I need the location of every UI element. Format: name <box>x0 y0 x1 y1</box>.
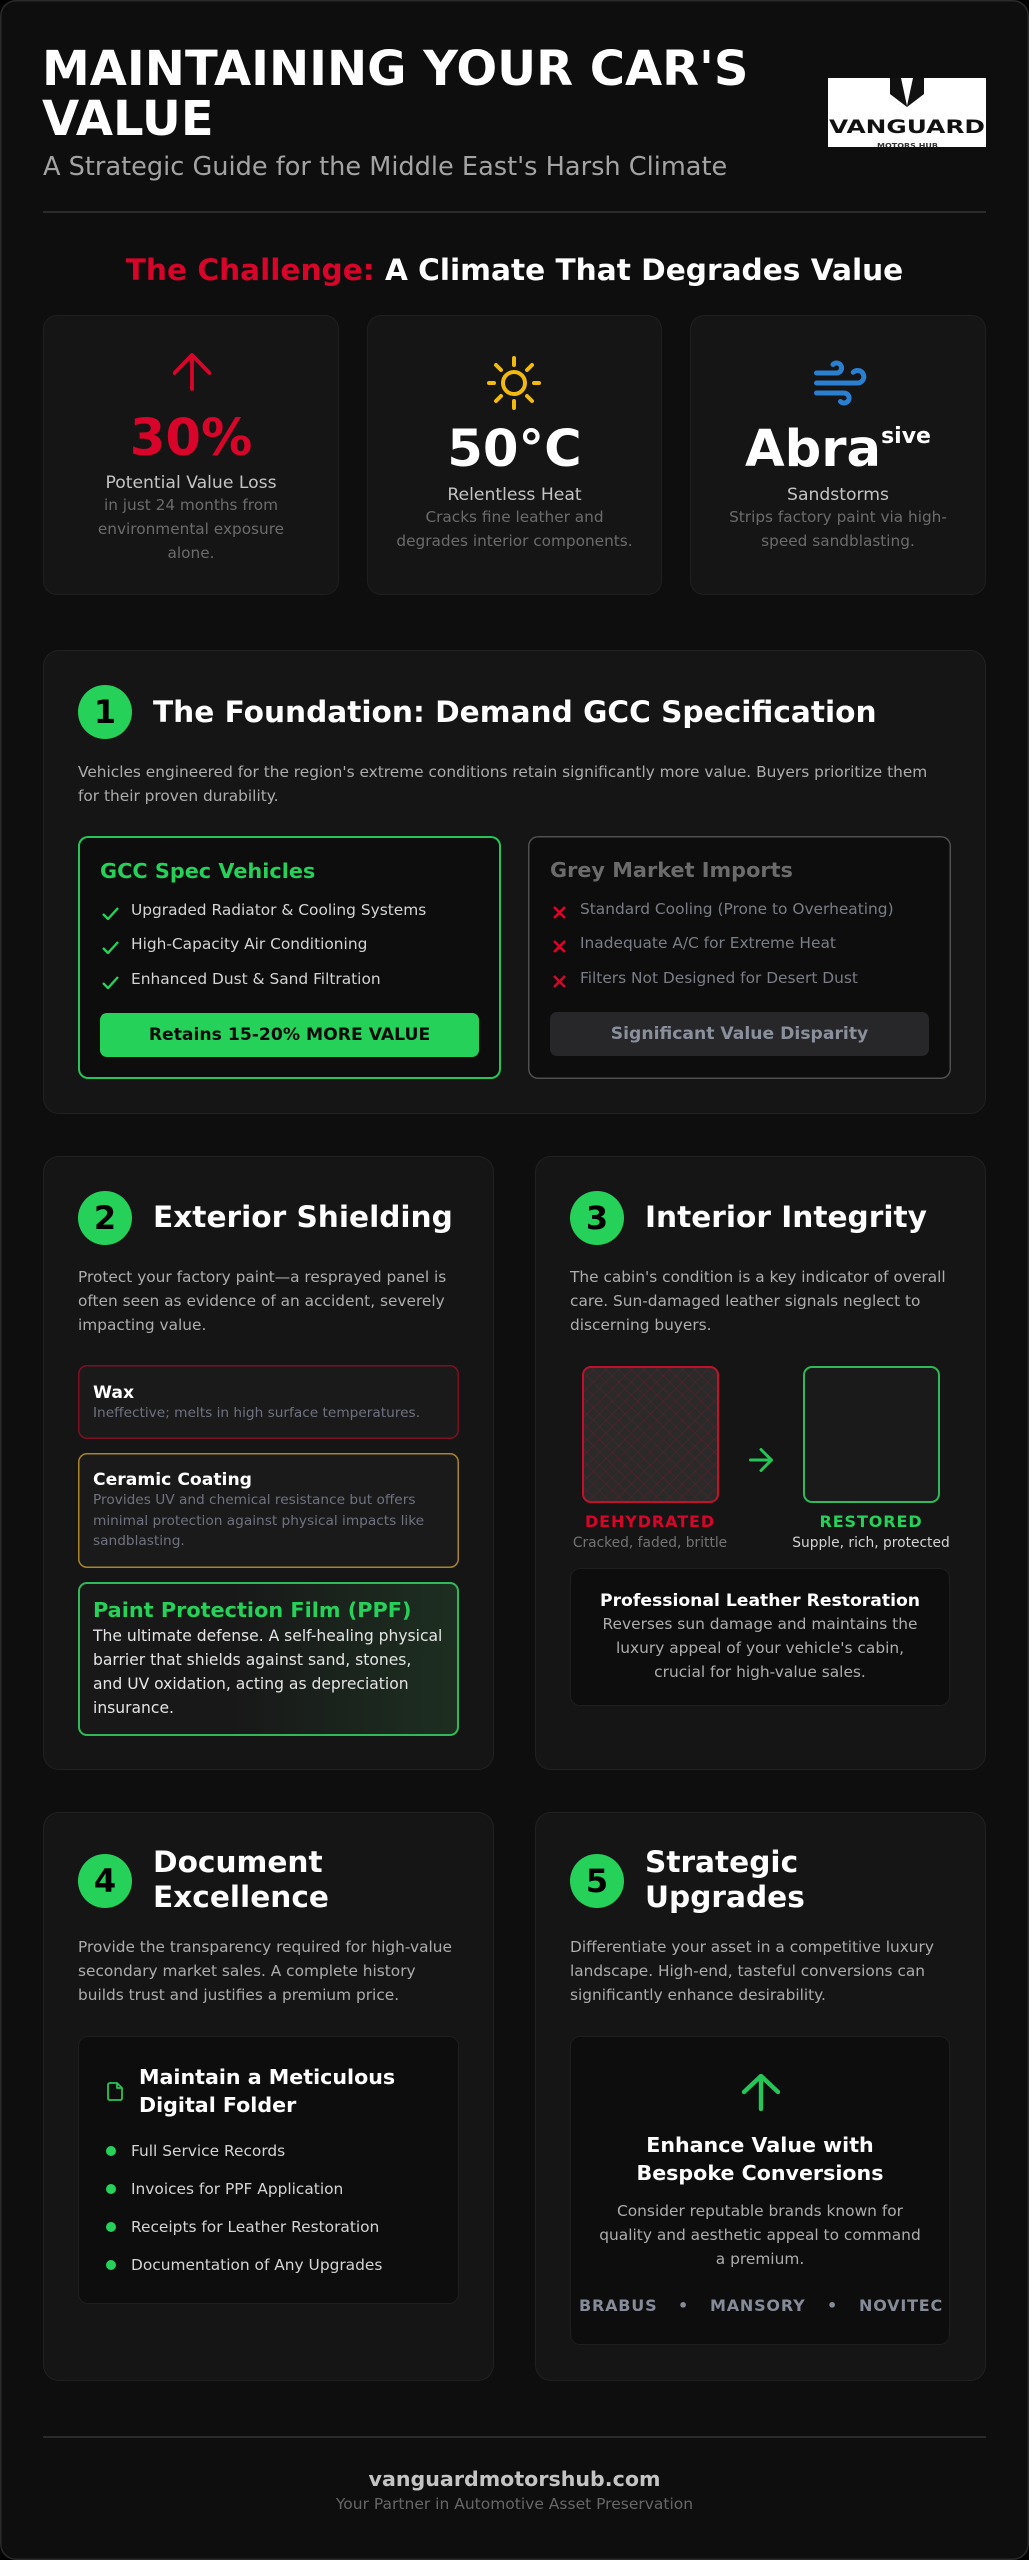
stat description: speed sandblasting. <box>761 532 915 550</box>
panel: stat 30 percent <box>43 315 339 595</box>
intro text <box>78 763 927 805</box>
heading: the challenge: The Challenge: A Climate That Degrades Value <box>126 253 903 287</box>
intro text: Provide the transparency required for high-value <box>78 1938 452 1956</box>
swatch: dehydrated leather <box>582 1366 719 1503</box>
intro text <box>78 1938 452 2004</box>
brand names: • <box>678 2296 689 2315</box>
panel: digital folder checklist <box>78 2036 459 2304</box>
disparity badge <box>550 1012 929 1056</box>
option: wax: Ineffective; melts in high surface temperatures. <box>93 1405 420 1421</box>
stat value: 30% <box>130 408 252 468</box>
callout: professional leather restoration <box>570 1568 950 1706</box>
icon: cross <box>553 975 566 988</box>
option: wax <box>78 1365 459 1439</box>
footer website: vanguardmotorshub.com <box>369 2467 660 2491</box>
brand names: NOVITEC <box>859 2296 943 2315</box>
option: paint protection film: and UV oxidation, acting as depreciation <box>93 1675 409 1693</box>
intro text: impacting value. <box>78 1316 206 1334</box>
option: paint protection film <box>78 1582 459 1736</box>
icon: cross <box>553 940 566 953</box>
panel: section 5 strategic upgrades <box>535 1812 986 2381</box>
caption: restored: Supple, rich, protected <box>792 1535 950 1551</box>
intro text: care. Sun-damaged leather signals neglect to <box>570 1292 920 1310</box>
logo: Vanguard Motors Hub <box>828 78 986 147</box>
heading: The Foundation: Demand GCC Specification <box>153 695 877 729</box>
stat value: 50°C <box>447 419 582 479</box>
checklist items: Full Service Records <box>131 2142 285 2160</box>
number badge 1: 1 <box>94 693 116 731</box>
stat description: degrades interior components. <box>396 532 633 550</box>
heading: Document <box>153 1845 323 1879</box>
option: ceramic coating <box>78 1453 459 1568</box>
grey feature list: Inadequate A/C for Extreme Heat <box>580 934 836 952</box>
icon: check <box>102 976 119 989</box>
intro text: builds trust and justifies a premium price. <box>78 1986 399 2004</box>
checklist heading <box>139 2065 395 2117</box>
brand names: • <box>827 2296 838 2315</box>
number badge 5 <box>570 1854 624 1908</box>
heading: Excellence <box>153 1880 329 1914</box>
stat description: alone. <box>168 544 214 562</box>
icon: check <box>102 941 119 954</box>
checklist items <box>106 2142 382 2274</box>
caption: dehydrated: Cracked, faded, brittle <box>573 1535 727 1551</box>
icon: document <box>107 2082 123 2101</box>
heading <box>153 1845 329 1914</box>
GCC feature list: Enhanced Dust & Sand Filtration <box>131 970 381 988</box>
option: paint protection film: Paint Protection Film (PPF) <box>93 1598 411 1622</box>
grey feature list: Filters Not Designed for Desert Dust <box>580 969 858 987</box>
callout: professional leather restoration: luxury appeal of your vehicle's cabin, <box>616 1639 904 1657</box>
icon: green up arrow <box>742 2074 780 2111</box>
option: wax: Wax <box>93 1383 134 1403</box>
icon: red up arrow <box>173 353 211 391</box>
footer tagline: Your Partner in Automotive Asset Preservation <box>336 2495 693 2513</box>
grey feature list: Standard Cooling (Prone to Overheating) <box>580 900 894 918</box>
value badge <box>100 1013 479 1057</box>
callout text: Consider reputable brands known for <box>617 2202 903 2220</box>
number badge 2: 2 <box>94 1199 116 1237</box>
option: ceramic coating: Ceramic Coating <box>93 1470 252 1490</box>
heading: Exterior Shielding <box>153 1200 453 1234</box>
label: dehydrated: DEHYDRATED <box>585 1512 715 1531</box>
number badge 4 <box>78 1854 132 1908</box>
callout: professional leather restoration: Professional Leather Restoration <box>600 1591 920 1611</box>
panel: stat 50 degrees <box>367 315 662 595</box>
intro text: discerning buyers. <box>570 1316 712 1334</box>
checklist heading: Maintain a Meticulous <box>139 2065 395 2089</box>
panel: section 3 interior integrity <box>535 1156 986 1770</box>
stat description: Strips factory paint via high- <box>729 508 947 526</box>
brand names: BRABUS <box>579 2296 657 2315</box>
checklist items: Receipts for Leather Restoration <box>131 2218 379 2236</box>
heading: Interior Integrity <box>645 1200 927 1234</box>
stat description <box>729 508 947 550</box>
intro text: landscape. High-end, tasteful conversions can <box>570 1962 925 1980</box>
panel: section 2 exterior shielding <box>43 1156 494 1770</box>
panel: GCC spec vehicles <box>78 836 501 1079</box>
brand names: MANSORY <box>710 2296 805 2315</box>
callout heading: Enhance Value with <box>646 2133 874 2157</box>
stat description: environmental exposure <box>98 520 284 538</box>
panel: bespoke conversions <box>570 2036 950 2345</box>
stat value: Abrasive <box>745 419 931 479</box>
title: MAINTAINING YOUR CAR'S <box>42 41 748 97</box>
grey heading: Grey Market Imports <box>550 858 793 882</box>
intro text <box>570 1268 946 1334</box>
heading: Upgrades <box>645 1880 805 1914</box>
intro text: for their proven durability. <box>78 787 279 805</box>
option: paint protection film: barrier that shields against sand, stones, <box>93 1651 411 1669</box>
stat label: Relentless Heat <box>447 485 582 505</box>
callout: professional leather restoration: crucial for high-value sales. <box>654 1663 866 1681</box>
panel: section 4 document excellence <box>43 1812 494 2381</box>
number badge 3 <box>570 1191 624 1245</box>
GCC heading: GCC Spec Vehicles <box>100 859 315 883</box>
icon: cross <box>553 906 566 919</box>
logo: Vanguard Motors Hub: VANGUARD <box>829 116 985 138</box>
stat description: in just 24 months from <box>104 496 278 514</box>
panel: stat abrasive <box>690 315 986 595</box>
callout text: a premium. <box>716 2250 804 2268</box>
option: ceramic coating: sandblasting. <box>93 1533 185 1549</box>
stat label: Sandstorms <box>787 485 889 505</box>
intro text: secondary market sales. A complete history <box>78 1962 416 1980</box>
GCC feature list: High-Capacity Air Conditioning <box>131 935 367 953</box>
label: restored: RESTORED <box>819 1512 923 1531</box>
title <box>42 41 748 147</box>
intro text: often seen as evidence of an accident, severely <box>78 1292 445 1310</box>
callout text: quality and aesthetic appeal to command <box>599 2226 921 2244</box>
swatch: restored leather <box>803 1366 940 1503</box>
number badge 1 <box>78 685 132 739</box>
value badge: Retains 15-20% MORE VALUE <box>149 1025 430 1045</box>
number badge 2 <box>78 1191 132 1245</box>
checklist items: Documentation of Any Upgrades <box>131 2256 382 2274</box>
brand names <box>579 2296 943 2315</box>
option: ceramic coating: Provides UV and chemical resistance but offers <box>93 1492 415 1508</box>
intro text: The cabin's condition is a key indicator of overall <box>570 1268 946 1286</box>
icon: arrow right <box>749 1448 773 1472</box>
GCC feature list <box>102 901 426 989</box>
disparity badge: Significant Value Disparity <box>611 1024 868 1044</box>
title: VALUE <box>42 91 214 147</box>
checklist heading: Digital Folder <box>139 2093 296 2117</box>
heading <box>645 1845 805 1914</box>
callout text <box>599 2202 921 2268</box>
number badge 3: 3 <box>586 1199 608 1237</box>
option: paint protection film: insurance. <box>93 1699 174 1717</box>
callout heading: Bespoke Conversions <box>637 2161 883 2185</box>
number badge 4: 4 <box>94 1862 116 1900</box>
icon: sun <box>487 356 541 410</box>
grey feature list <box>553 900 894 988</box>
stat description: Cracks fine leather and <box>425 508 604 526</box>
intro text <box>570 1938 934 2004</box>
option: paint protection film: The ultimate defense. A self-healing physical <box>93 1627 442 1645</box>
callout heading <box>637 2133 883 2185</box>
intro text <box>78 1268 446 1334</box>
panel: grey market imports <box>528 836 951 1079</box>
callout: professional leather restoration: Reverses sun damage and maintains the <box>603 1615 917 1633</box>
intro text: Protect your factory paint—a resprayed panel is <box>78 1268 446 1286</box>
stat label: Potential Value Loss <box>105 473 277 493</box>
icon: wind <box>814 360 866 406</box>
option: ceramic coating: minimal protection against physical impacts like <box>93 1513 424 1529</box>
intro text: Differentiate your asset in a competitive luxury <box>570 1938 934 1956</box>
intro text: Vehicles engineered for the region's extreme conditions retain significantly more value. Buyers prioritize them <box>78 763 927 781</box>
checklist items: Invoices for PPF Application <box>131 2180 343 2198</box>
subtitle: A Strategic Guide for the Middle East's Harsh Climate <box>43 152 727 182</box>
stat description <box>396 508 633 550</box>
number badge 5: 5 <box>586 1862 608 1900</box>
heading: Strategic <box>645 1845 798 1879</box>
intro text: significantly enhance desirability. <box>570 1986 826 2004</box>
stat description <box>98 496 284 562</box>
GCC feature list: Upgraded Radiator & Cooling Systems <box>131 901 426 919</box>
icon: check <box>102 907 119 920</box>
panel: section 1 the foundation <box>43 650 986 1114</box>
